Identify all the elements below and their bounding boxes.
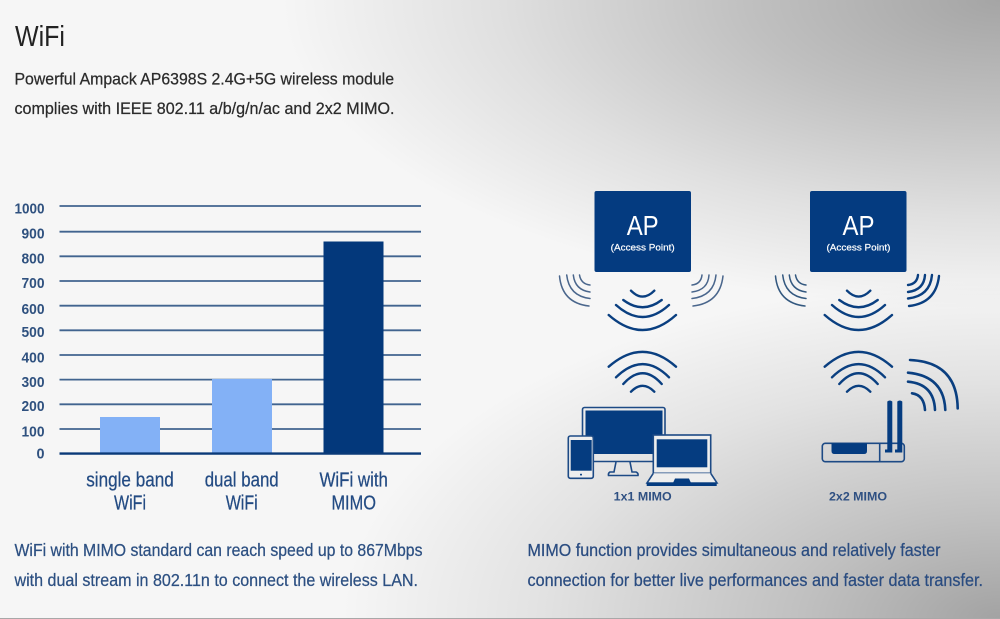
diagram: 2x2 MIMO — [776, 191, 958, 504]
diagram: 1x1 MIMO — [560, 191, 723, 504]
icon: devices — [568, 408, 717, 486]
caption: WiFi with MIMO speed — [14, 540, 423, 590]
icon: monitor — [582, 408, 665, 476]
intro text — [14, 70, 394, 118]
icon: laptop — [647, 435, 717, 486]
intro text: Powerful Ampack AP6398S 2.4G+5G wireless module — [14, 70, 394, 88]
downlink signal arcs — [609, 291, 676, 330]
y axis labels: 1000 — [14, 200, 44, 218]
caption: MIMO function: MIMO function provides simultaneous and relatively faster — [528, 540, 941, 560]
icon: phone — [568, 436, 593, 478]
category labels: dual band — [205, 470, 279, 492]
access point box — [810, 191, 906, 272]
y axis labels — [14, 200, 44, 462]
y axis labels: 200 — [22, 398, 44, 415]
y axis labels: 500 — [22, 324, 44, 341]
y axis labels: 900 — [22, 226, 44, 242]
label: 1x1 MIMO: 1x1 MIMO — [614, 492, 672, 504]
category labels: WiFi — [114, 492, 146, 514]
uplink signal arcs — [609, 352, 676, 392]
access point box: (Access Point) — [826, 242, 890, 254]
category labels: WiFi — [226, 492, 258, 514]
category labels: MIMO — [331, 492, 376, 514]
y axis labels: 0 — [36, 446, 44, 462]
title: WiFi — [15, 21, 65, 53]
caption: WiFi with MIMO speed: WiFi with MIMO standard can reach speed up to 867Mbps — [14, 540, 423, 560]
label: 2x2 MIMO: 2x2 MIMO — [829, 492, 887, 504]
intro text: complies with IEEE 802.11 a/b/g/n/ac and 2x2 MIMO. — [14, 99, 394, 118]
side signal arcs — [560, 275, 723, 306]
y axis labels: 400 — [22, 350, 44, 366]
downlink signal arcs — [825, 291, 892, 330]
y axis labels: 300 — [22, 374, 44, 391]
bar: single band WiFi — [100, 417, 160, 453]
caption: WiFi with MIMO speed: with dual stream in 802.11n to connect the wireless LAN. — [14, 570, 418, 590]
category labels: WiFi with — [319, 470, 388, 492]
y axis labels: 700 — [22, 275, 44, 292]
icon: router — [822, 400, 904, 462]
y axis labels: 600 — [22, 301, 44, 318]
category labels — [86, 470, 388, 514]
bar: WiFi with MIMO — [324, 242, 384, 454]
antenna signal arcs — [908, 360, 958, 410]
bar chart — [14, 200, 421, 514]
y axis labels: 100 — [22, 424, 44, 440]
side signal arcs — [776, 275, 939, 306]
bar: dual band WiFi — [212, 379, 272, 453]
category labels: single band — [86, 470, 174, 492]
access point box: (Access Point) — [611, 242, 675, 254]
access point box: AP — [842, 210, 874, 241]
access point box: AP — [627, 210, 659, 241]
y axis labels: 800 — [22, 250, 44, 268]
access point box — [594, 191, 691, 272]
uplink signal arcs — [825, 352, 892, 392]
caption: MIMO function — [528, 540, 983, 590]
